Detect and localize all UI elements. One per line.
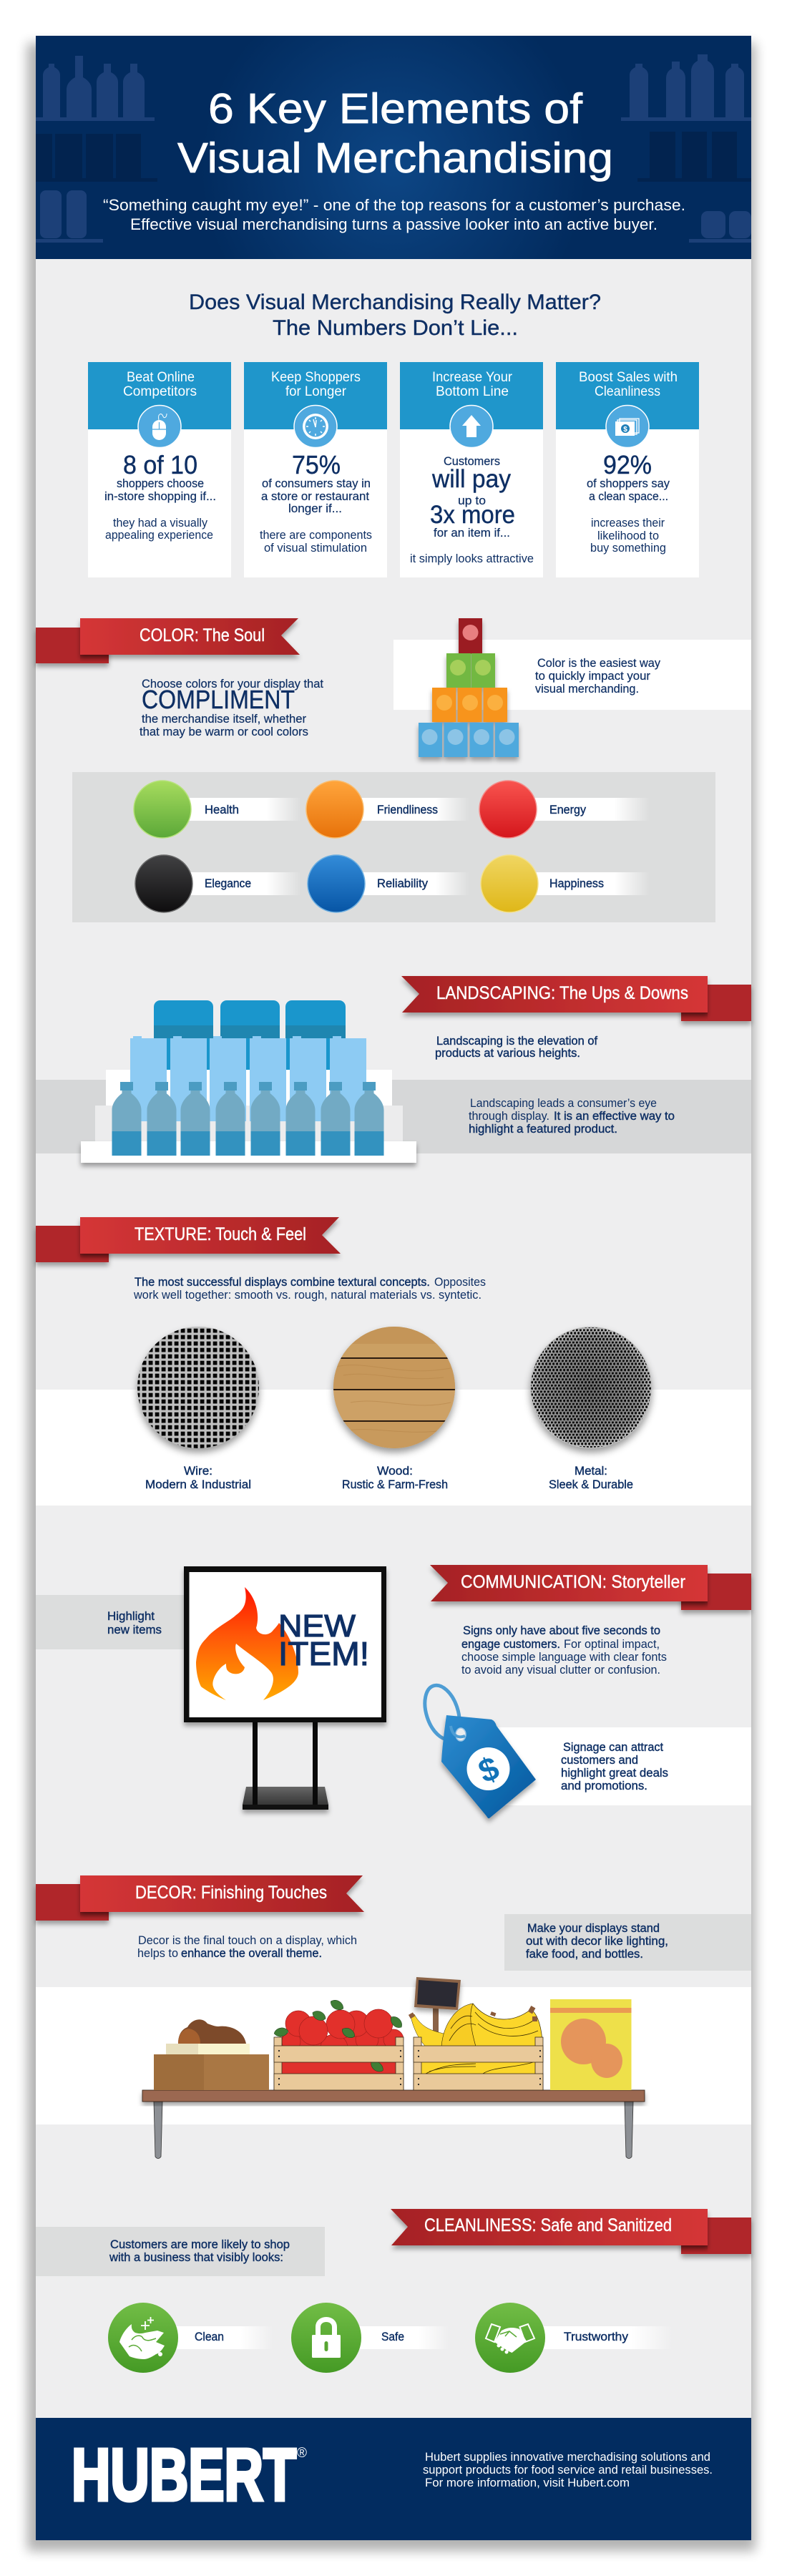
title: Visual Merchandising [177, 135, 613, 182]
text: signage attract: customers and [561, 1753, 638, 1767]
ribbon: texture: TEXTURE: Touch & Feel [135, 1224, 306, 1244]
stat card: stay longer: there are components [260, 529, 372, 542]
ribbon: cleanliness: CLEANLINESS: Safe and Sanitized [424, 2215, 672, 2235]
texture: wood: Rustic & Farm-Fresh [342, 1478, 448, 1491]
company description: For more information, visit Hubert.com [425, 2476, 630, 2489]
trait: clean: Clean [195, 2330, 224, 2343]
subtitle: “Something caught my eye!” - one of the top reasons for a customer’s purchase. [103, 196, 685, 214]
stat card: cleanliness: Cleanliness [595, 384, 660, 399]
grey band: landscaping [36, 1080, 751, 1153]
ribbon: landscaping: LANDSCAPING: The Ups & Downs [436, 983, 688, 1003]
callout: decor ideas: fake food, and bottles. [526, 1947, 643, 1961]
text: five seconds: Signs only have about five seconds to [463, 1624, 660, 1637]
callout: highlight new items: new items [107, 1623, 162, 1636]
icon: cash: $ [623, 426, 627, 434]
swatch: energy: Energy [549, 803, 586, 816]
stat card: bottom line: will pay [431, 465, 511, 493]
stat card: online competitors: Beat Online [127, 370, 195, 385]
callout: decor ideas [504, 1914, 751, 1971]
icon: price tag: $ [473, 1749, 504, 1790]
stat card: online competitors: in-store shopping if... [104, 490, 216, 503]
sign text [278, 1609, 369, 1672]
stat card: stay longer [244, 362, 387, 577]
stat card: cleanliness: likelihood to [597, 530, 659, 542]
stat card: cleanliness: 92% [603, 450, 652, 479]
ribbon: cleanliness [391, 2209, 751, 2254]
swatch: elegance [135, 855, 251, 912]
stat card: online competitors: Competitors [123, 384, 197, 399]
sign text: NEW [278, 1609, 356, 1644]
subtitle [103, 196, 685, 233]
swatch: friendliness: Friendliness [377, 803, 438, 816]
stat card: stay longer: of visual stimulation [264, 542, 367, 555]
logo: Hubert: HUBERT [72, 2434, 296, 2516]
text: featured product: It is an effective way to [554, 1109, 675, 1123]
stat card: stay longer: longer if... [288, 502, 342, 515]
shelf silhouettes left [36, 56, 155, 243]
text: textural concepts: The most successful displays combine textural concepts. [135, 1275, 430, 1289]
title [177, 85, 613, 182]
ribbon: decor [36, 1875, 364, 1921]
callout: highlight new items: Highlight [107, 1609, 155, 1623]
food box [154, 2019, 269, 2090]
text: elevation: Landscaping is the elevation of [436, 1034, 597, 1048]
subtitle: Effective visual merchandising turns a passive looker into an active buyer. [130, 215, 658, 233]
price sign [414, 1977, 461, 2034]
icon: washing hands [119, 2317, 165, 2359]
callout: visibly looks: Customers are more likely to shop [110, 2238, 290, 2251]
white band: textures [36, 1390, 751, 1506]
text: easiest way: to quickly impact your [535, 669, 650, 683]
stat card: bottom line: Customers [444, 455, 500, 468]
swatch: reliability [308, 855, 428, 912]
stat card: bottom line: up to [458, 494, 486, 507]
section heading: numbers [189, 291, 601, 340]
ribbon: communication [430, 1565, 751, 1610]
swatch: health: Health [205, 803, 239, 816]
ribbon: decor: DECOR: Finishing Touches [135, 1883, 327, 1903]
texture: wire: Modern & Industrial [145, 1478, 251, 1491]
section heading: numbers: Does Visual Merchandising Really Matter? [189, 291, 601, 314]
sign stand [184, 1566, 386, 1810]
stat card: bottom line: Bottom Line [436, 384, 509, 399]
text: signage attract [561, 1740, 668, 1792]
text: final touch: helps to [137, 1946, 178, 1960]
trait: clean [108, 2303, 273, 2373]
ribbon: color: COLOR: The Soul [140, 625, 265, 645]
bottles [112, 1082, 383, 1156]
text: featured product: Landscaping leads a consumer’s eye [470, 1096, 657, 1110]
ribbon: communication: COMMUNICATION: Storyteller [461, 1572, 685, 1592]
text: compliment: Choose colors for your display that [142, 677, 323, 691]
callout: visibly looks: with a business that visibly looks: [109, 2250, 283, 2264]
text: five seconds: engage customers. [461, 1637, 560, 1651]
swatch: elegance: Elegance [205, 877, 251, 890]
stat card: stay longer: 75% [292, 450, 341, 479]
text: signage attract: highlight great deals [561, 1766, 668, 1780]
text: five seconds: to avoid any visual clutter or confusion. [461, 1663, 660, 1677]
banana crate [409, 2004, 543, 2090]
ribbon: texture [36, 1217, 341, 1262]
company description: support products for food service and retail businesses. [423, 2463, 713, 2477]
stat card: stay longer: a store or restaurant [261, 490, 369, 503]
icon: mouse [138, 405, 181, 448]
callout: highlight new items [36, 1595, 184, 1649]
icon: up arrow [450, 405, 493, 448]
stat card: stay longer: of consumers stay in [262, 477, 371, 490]
ribbon: color [36, 618, 300, 663]
stat card: cleanliness: a clean space... [589, 490, 668, 503]
trait: safe: Safe [381, 2330, 404, 2343]
text: signage attract: and promotions. [561, 1779, 647, 1792]
text: textural concepts: Opposites [434, 1275, 486, 1289]
icon: clock [294, 405, 337, 448]
shelf [142, 2090, 645, 2102]
stat card: bottom line: Increase Your [432, 370, 513, 385]
panel: colour meanings [72, 772, 715, 922]
text: five seconds [461, 1624, 667, 1677]
icon: flame [196, 1587, 298, 1700]
text: elevation [435, 1034, 597, 1060]
stat card: online competitors: they had a visually [113, 517, 208, 530]
trait: safe [291, 2303, 449, 2373]
text: easiest way [535, 656, 660, 696]
apple crate [273, 1998, 404, 2090]
text: featured product: highlight a featured product. [469, 1122, 617, 1136]
footer [36, 2418, 751, 2540]
stat card: cleanliness: of shoppers say [587, 477, 670, 490]
header banner [36, 36, 751, 259]
texture: wire: Wire: [184, 1464, 212, 1478]
logo: Hubert: ® [297, 2446, 307, 2461]
texture: wire [137, 1327, 259, 1491]
text: textural concepts [133, 1275, 486, 1302]
display: stepped products [81, 1000, 416, 1163]
company description [423, 2450, 713, 2489]
text: easiest way: visual merchanding. [535, 682, 639, 696]
product pyramid [419, 618, 519, 757]
cereal box [550, 1999, 631, 2090]
swatch: happiness: Happiness [549, 877, 604, 890]
callout: decor ideas: Make your displays stand [527, 1921, 660, 1935]
stat card: online competitors [88, 362, 231, 577]
text: elevation: products at various heights. [435, 1046, 580, 1060]
icon: price tag [419, 1681, 536, 1818]
swatch: reliability: Reliability [377, 877, 428, 890]
text: compliment [140, 677, 323, 738]
swatch: energy [479, 781, 586, 838]
stat card: bottom line [400, 362, 543, 577]
stat card: bottom line: for an item if... [434, 527, 510, 540]
swatch: health [134, 781, 239, 838]
trait: trustworthy: Trustworthy [564, 2330, 629, 2343]
icon: padlock [312, 2320, 341, 2358]
stat card: online competitors: appealing experience [105, 529, 213, 542]
text: final touch [137, 1933, 357, 1960]
text: featured product: through display. [469, 1109, 549, 1123]
text: five seconds: For optinal impact, [564, 1637, 660, 1651]
shelf silhouettes right [621, 54, 751, 243]
trait: trustworthy [475, 2303, 673, 2373]
white band: shelf [36, 1987, 751, 2124]
stat card: stay longer: Keep Shoppers [271, 370, 361, 385]
text: five seconds: choose simple language with clear fonts [461, 1650, 667, 1664]
white band: color note [394, 640, 751, 710]
company description: Hubert supplies innovative merchadising solutions and [425, 2450, 710, 2464]
swatch: happiness [481, 855, 604, 912]
shelf brackets [154, 2102, 633, 2158]
sign text: ITEM! [278, 1635, 369, 1672]
text: easiest way: Color is the easiest way [537, 656, 660, 670]
icon: handshake [486, 2324, 534, 2354]
text: textural concepts: work well together: smooth vs. rough, natural materials vs. syntetic. [133, 1288, 482, 1302]
swatch: friendliness [306, 781, 438, 838]
stat card: online competitors: shoppers choose [117, 477, 204, 490]
stat card: cleanliness: increases their [591, 517, 665, 530]
text: signage attract: Signage can attract [563, 1740, 663, 1754]
icon: cash [606, 405, 649, 448]
white band: signage [494, 1727, 751, 1805]
stat card: cleanliness: buy something [590, 542, 666, 555]
text: compliment: the merchandise itself, whether [142, 712, 306, 726]
text: compliment: COMPLIMENT [142, 685, 295, 714]
stat card: cleanliness: Boost Sales with [579, 370, 678, 385]
text: compliment: that may be warm or cool colors [140, 725, 308, 738]
callout: decor ideas: out with decor like lighting, [526, 1934, 668, 1948]
text: featured product [469, 1096, 675, 1136]
stat card: bottom line: it simply looks attractive [410, 552, 534, 565]
stat card: online competitors: 8 of 10 [123, 450, 197, 479]
text: final touch: Decor is the final touch on a display, which [138, 1933, 357, 1947]
texture: wood [333, 1327, 455, 1491]
texture: wood: Wood: [377, 1464, 413, 1478]
title: 6 Key Elements of [208, 85, 583, 132]
stat card: stay longer: for Longer [285, 384, 347, 399]
text: final touch: enhance the overall theme. [181, 1946, 322, 1960]
callout: visibly looks [36, 2227, 325, 2276]
ribbon: landscaping [401, 976, 751, 1021]
section heading: numbers: The Numbers Don’t Lie... [273, 316, 518, 340]
texture: metal [530, 1327, 652, 1491]
stat card: cleanliness [556, 362, 699, 577]
texture: metal: Metal: [575, 1464, 607, 1478]
stat card: bottom line: 3x more [430, 501, 515, 529]
texture: metal: Sleek & Durable [549, 1478, 633, 1491]
